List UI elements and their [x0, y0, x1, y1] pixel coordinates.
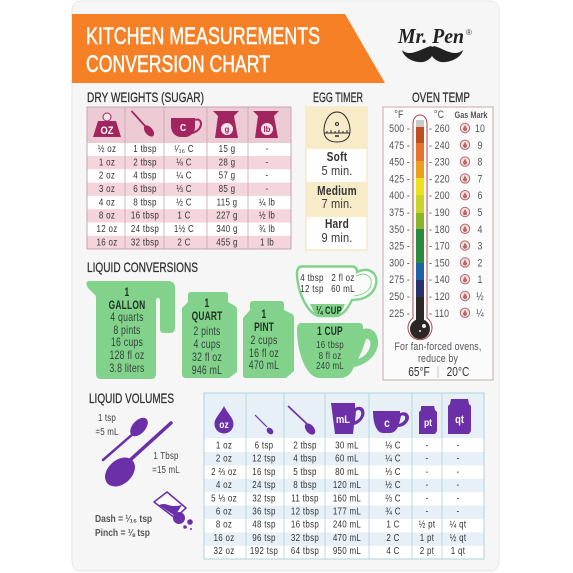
- gas mark numbers: 8: [478, 157, 483, 169]
- dry weights values: 2 C: [177, 237, 191, 248]
- liquid volumes values: 4 oz: [216, 479, 232, 490]
- dry weights values: ¼ C: [176, 170, 192, 181]
- fan-forced note: For fan-forced ovens,: [395, 341, 481, 353]
- heading: liquid conversions: LIQUID CONVERSIONS: [87, 259, 198, 275]
- title banner: CONVERSION CHART: [86, 51, 270, 78]
- dry weights values: [97, 143, 275, 248]
- icon: scale pounds: lb: [263, 125, 271, 134]
- liquid volumes values: 96 tsp: [252, 532, 276, 543]
- panel: egg timer: Medium: [317, 184, 357, 198]
- liquid volumes values: ⅛ C: [385, 440, 401, 451]
- liquid volumes values: -: [426, 479, 428, 490]
- liquid volumes values: 950 mL: [333, 545, 361, 556]
- celsius scale: - 240: [429, 140, 450, 152]
- liquid volumes values: [211, 440, 467, 556]
- fahrenheit scale: 450 -: [389, 157, 410, 169]
- heading: liquid volumes: LIQUID VOLUMES: [89, 390, 174, 406]
- dry weights values: ½ oz: [98, 143, 116, 154]
- icon: quart jar: qt: [455, 414, 465, 426]
- teaspoon label: [95, 412, 119, 437]
- title banner: [72, 14, 385, 83]
- icon: oz drop: oz: [219, 419, 229, 430]
- panel: pint jar: 16 fl oz: [249, 348, 279, 360]
- dry weights values: 227 g: [216, 210, 238, 221]
- liquid volumes values: 32 oz: [214, 545, 235, 556]
- oven column headings: [394, 109, 488, 121]
- panel: gallon jug: GALLON: [109, 300, 145, 312]
- panel: quart jar: 946 mL: [192, 365, 222, 377]
- dry weights values: 57 g: [219, 170, 235, 181]
- icon: mL mug: [331, 403, 365, 434]
- celsius scale: - 150: [429, 258, 450, 270]
- gas mark numbers: 5: [478, 207, 483, 219]
- panel: quarter cup: 60 mL: [331, 283, 355, 294]
- liquid volumes values: 8 oz: [216, 519, 232, 530]
- tablespoon label: 1 Tbsp: [153, 450, 179, 461]
- dry weights values: 28 g: [219, 156, 235, 168]
- liquid volumes values: 2 ⅔ oz: [211, 466, 237, 477]
- gas mark numbers: [475, 123, 485, 320]
- panel: quart jar: 4 cups: [193, 339, 221, 351]
- panel: quarter cup: 4 tbsp: [300, 272, 324, 283]
- gas mark numbers: 4: [478, 224, 483, 236]
- liquid volumes values: 2 tbsp: [293, 440, 317, 451]
- liquid volumes values: -: [457, 466, 459, 477]
- logo: Mr. Pen: [397, 24, 472, 62]
- panel: quart jar: 1: [205, 298, 209, 310]
- gas mark numbers: 1: [478, 274, 483, 287]
- liquid volumes values: 16 oz: [214, 532, 235, 543]
- gas mark numbers: 10: [475, 123, 485, 135]
- liquid volumes values: 2 pt: [420, 545, 434, 556]
- fahrenheit scale: 500 -: [389, 123, 410, 135]
- gas mark icons: [460, 123, 470, 317]
- dry weights values: 32 tbsp: [131, 237, 159, 248]
- panel: one cup: 16 tbsp: [316, 339, 344, 350]
- liquid volumes values: 2 C: [386, 532, 400, 543]
- panel: one cup: 1 CUP: [317, 326, 343, 338]
- panel: gallon jug: 3.8 liters: [109, 363, 145, 375]
- panel: egg timer: Hard: [325, 217, 349, 231]
- panel: egg timer: 5 min.: [321, 163, 353, 178]
- liquid volumes values: 32 tsp: [252, 492, 276, 504]
- liquid volumes values: 470 mL: [333, 532, 361, 543]
- icon: egg timer: [324, 112, 350, 142]
- dry weights values: 4 oz: [99, 196, 115, 208]
- panel: gallon jug: 16 cups: [111, 337, 143, 349]
- liquid volumes values: -: [457, 479, 459, 490]
- liquid volumes values: -: [457, 453, 459, 464]
- icon: salt shaker: [154, 492, 193, 530]
- liquid volumes values: -: [457, 492, 459, 504]
- liquid volumes values: ½ pt: [419, 519, 436, 530]
- panel: quarter cup: 12 tsp: [300, 283, 324, 294]
- fahrenheit scale: 350 -: [389, 224, 410, 236]
- panel: gallon jug: 128 fl oz: [109, 350, 145, 362]
- liquid volumes values: 5 ⅓ oz: [211, 492, 237, 504]
- liquid volumes values: 32 tbsp: [291, 532, 319, 543]
- liquid volumes values: -: [426, 492, 428, 504]
- liquid volumes values: 1 oz: [216, 440, 232, 451]
- dry weights values: -: [266, 143, 268, 154]
- dry weights values: 1 C: [177, 210, 191, 221]
- dry weights values: 455 g: [216, 237, 238, 248]
- liquid volumes values: -: [426, 453, 428, 464]
- dash and pinch note: Dash = ¹⁄₁₆ tsp: [95, 513, 152, 524]
- dry weights values: 3 oz: [99, 183, 115, 194]
- dry weights values: 1 oz: [99, 156, 115, 168]
- oven column headings: °C: [434, 109, 444, 121]
- fan-forced note: [395, 341, 481, 379]
- liquid volumes values: 240 mL: [333, 519, 361, 530]
- dry weights values: 2 oz: [99, 170, 115, 181]
- liquid volumes values: 12 tsp: [252, 453, 276, 464]
- dry weights values: -: [266, 170, 268, 181]
- fan-forced note: 65°F: [408, 365, 430, 379]
- panel: pint jar: 2 cups: [250, 335, 278, 347]
- liquid volumes values: 1 pt: [420, 532, 434, 543]
- fahrenheit scale: 225 -: [389, 308, 410, 320]
- dry weights values: 85 g: [219, 183, 235, 194]
- liquid volumes values: 16 tsp: [252, 466, 276, 477]
- icon: pint jar: [419, 406, 437, 434]
- heading: egg timer: EGG TIMER: [313, 89, 363, 105]
- celsius scale: - 190: [429, 207, 450, 219]
- liquid volumes values: 11 tbsp: [291, 492, 319, 504]
- fahrenheit scale: 250 -: [389, 291, 410, 303]
- liquid volumes values: 1 C: [386, 519, 400, 530]
- icon: teaspoon small: [255, 415, 275, 436]
- liquid volumes values: ½ C: [385, 479, 401, 490]
- dry weights values: 16 tbsp: [131, 210, 159, 221]
- fahrenheit scale: 300 -: [389, 258, 410, 270]
- icon: cup: [171, 118, 201, 137]
- liquid volumes values: 5 tbsp: [293, 466, 317, 477]
- liquid volumes values: 120 mL: [333, 479, 361, 490]
- panel: one cup: [297, 323, 378, 378]
- liquid volumes values: ¼ C: [385, 453, 401, 464]
- dry weights values: ¼ lb: [259, 196, 275, 208]
- gas mark numbers: 7: [478, 174, 483, 186]
- dry weights values: 4 tbsp: [133, 170, 157, 181]
- dry weights values: 1 lb: [260, 237, 274, 248]
- logo: Mr. Pen: ®: [466, 28, 472, 37]
- fahrenheit scale: 400 -: [389, 190, 410, 203]
- liquid volumes values: 12 tbsp: [291, 506, 319, 517]
- liquid volumes values: 160 mL: [333, 492, 361, 504]
- panel: quart jar: 2 pints: [193, 326, 221, 338]
- celsius scale: - 110: [429, 308, 449, 320]
- liquid volumes values: 192 tsp: [250, 545, 278, 556]
- panel: oven temperature: [383, 107, 493, 380]
- oven column headings: Gas Mark: [454, 110, 488, 120]
- dry weights values: ½ C: [176, 196, 192, 208]
- dry weights values: ⅓ C: [176, 183, 192, 194]
- icon: tablespoon large: [288, 406, 317, 437]
- title banner: KITCHEN MEASUREMENTS: [86, 23, 320, 50]
- fahrenheit scale: 425 -: [389, 174, 410, 186]
- liquid volumes values: ½ qt: [450, 532, 467, 543]
- panel: pint jar: PINT: [254, 322, 274, 334]
- panel: quarter cup: [297, 266, 376, 317]
- dry weights values: 1 tbsp: [133, 143, 157, 154]
- dry weights values: 8 oz: [99, 210, 115, 221]
- dash and pinch note: Pinch = ⅛ tsp: [95, 527, 150, 538]
- icon: quart jar: [448, 399, 471, 434]
- celsius scale: - 170: [429, 241, 450, 253]
- liquid volumes values: 177 mL: [333, 506, 361, 517]
- celsius scale: - 220: [429, 174, 450, 186]
- dry weights values: 2 tbsp: [133, 156, 157, 168]
- panel: egg timer: 9 min.: [321, 230, 353, 245]
- liquid volumes values: ¼ qt: [450, 519, 467, 530]
- liquid volumes values: 16 tbsp: [291, 519, 319, 530]
- icon: scale grams: g: [225, 125, 230, 134]
- oven column headings: °F: [394, 109, 404, 121]
- icon: teaspoon: [103, 414, 151, 460]
- panel: pint jar: [243, 301, 294, 378]
- liquid volumes values: 64 tbsp: [291, 545, 319, 556]
- liquid volumes values: -: [457, 440, 459, 451]
- liquid volumes values: 1 qt: [451, 545, 465, 556]
- liquid volumes values: ¾ C: [385, 506, 401, 517]
- celsius scale: [429, 123, 450, 320]
- dry weights values: 340 g: [216, 223, 238, 234]
- panel: egg timer: [306, 107, 367, 250]
- dry weights values: 6 tbsp: [133, 183, 157, 194]
- panel: gallon jug: [86, 281, 175, 379]
- panel: quart jar: [182, 292, 237, 378]
- fan-forced note: 20°C: [447, 365, 469, 379]
- panel: one cup: 240 mL: [316, 360, 344, 371]
- panel: quarter cup: ¼ CUP: [316, 305, 342, 317]
- fahrenheit scale: 275 -: [389, 274, 410, 287]
- panel: liquid volumes table: [204, 393, 484, 559]
- panel: dry weights table: [87, 107, 291, 249]
- icon: cup: [373, 411, 409, 433]
- tablespoon label: =15 mL: [152, 464, 180, 475]
- liquid volumes values: -: [426, 506, 428, 517]
- gas mark numbers: 3: [478, 241, 483, 253]
- dry weights values: 15 g: [219, 143, 235, 154]
- dry weights values: 12 oz: [97, 223, 118, 234]
- gas mark numbers: ¼: [476, 308, 484, 320]
- icon: tablespoon: [132, 111, 156, 138]
- icon: tablespoon: [99, 423, 171, 492]
- liquid volumes values: 24 tsp: [252, 479, 276, 490]
- celsius scale: - 180: [429, 224, 450, 236]
- panel: quarter cup: 2 fl oz: [331, 272, 355, 283]
- teaspoon label: 1 tsp: [98, 412, 116, 423]
- gas mark numbers: ½: [476, 291, 484, 303]
- panel: one cup: 8 fl oz: [319, 350, 342, 361]
- icon: mL mug: mL: [336, 414, 350, 426]
- dry weights values: ¹⁄₁₆ C: [174, 143, 194, 154]
- teaspoon label: =5 mL: [95, 426, 119, 437]
- panel: gallon jug: 4 quarts: [110, 312, 144, 324]
- liquid volumes values: 60 mL: [335, 453, 359, 464]
- liquid volumes values: 30 mL: [335, 440, 359, 451]
- dry weights values: -: [266, 156, 268, 168]
- liquid volumes values: 48 tsp: [252, 519, 276, 530]
- card background: [72, 1, 499, 571]
- panel: pint jar: 470 mL: [249, 360, 279, 372]
- dry weights values: 1½ C: [174, 223, 194, 234]
- liquid volumes values: -: [457, 506, 459, 517]
- icon: scale grams: [213, 111, 239, 138]
- gas mark numbers: 9: [478, 140, 483, 152]
- thermometer: [408, 115, 432, 340]
- liquid volumes values: 6 tsp: [255, 440, 273, 451]
- heading: oven temp: OVEN TEMP: [412, 89, 470, 105]
- heading: dry weights: DRY WEIGHTS (SUGAR): [87, 89, 204, 105]
- dry weights values: ⅛ C: [176, 156, 192, 168]
- dry weights values: -: [266, 183, 268, 194]
- panel: gallon jug: 8 pints: [113, 325, 141, 337]
- gas mark numbers: 2: [478, 258, 483, 270]
- liquid volumes values: ⅓ C: [385, 466, 401, 477]
- celsius scale: - 140: [429, 274, 450, 287]
- icon: oz weight: OZ: [101, 125, 113, 137]
- panel: pint jar: 1: [262, 309, 266, 321]
- icon: oz weight: [93, 113, 121, 137]
- panel: quart jar: QUART: [192, 311, 223, 323]
- dry weights values: 8 tbsp: [133, 196, 157, 208]
- dry weights values: ½ lb: [259, 210, 275, 221]
- panel: egg timer: Soft: [327, 150, 347, 164]
- icon: cup: c: [384, 417, 390, 430]
- logo: Mr. Pen: Mr. Pen: [397, 24, 464, 48]
- celsius scale: - 200: [429, 190, 450, 203]
- celsius scale: - 120: [429, 291, 450, 303]
- liquid volumes values: 8 tbsp: [293, 479, 317, 490]
- liquid volumes values: 80 mL: [335, 466, 359, 477]
- panel: quart jar: 32 fl oz: [192, 352, 222, 364]
- dry weights values: 24 tbsp: [131, 223, 159, 234]
- dry weights values: 115 g: [217, 196, 237, 208]
- liquid volumes values: 6 oz: [216, 506, 232, 517]
- fahrenheit scale: 475 -: [389, 140, 410, 152]
- icon: cup: C: [180, 122, 186, 133]
- fan-forced note: reduce by: [418, 353, 458, 365]
- tablespoon label: [152, 450, 180, 475]
- celsius scale: - 260: [429, 123, 450, 135]
- liquid volumes values: 4 tbsp: [293, 453, 317, 464]
- fahrenheit scale: 325 -: [389, 241, 410, 253]
- dash and pinch note: [95, 513, 152, 538]
- fahrenheit scale: 375 -: [389, 207, 410, 219]
- liquid volumes values: 2 oz: [216, 453, 232, 464]
- dry weights values: 16 oz: [97, 237, 118, 248]
- dry weights values: ¾ lb: [259, 223, 275, 234]
- panel: gallon jug: 1: [125, 287, 129, 299]
- fahrenheit scale: [389, 123, 410, 320]
- icon: pint jar: pt: [424, 417, 432, 428]
- liquid volumes values: -: [426, 440, 428, 451]
- gas mark numbers: 6: [478, 190, 483, 203]
- icon: scale pounds: [253, 111, 279, 138]
- liquid volumes values: 36 tsp: [252, 506, 276, 517]
- liquid volumes values: 4 C: [386, 545, 400, 556]
- liquid volumes values: -: [426, 466, 428, 477]
- panel: egg timer: 7 min.: [321, 196, 353, 211]
- liquid volumes values: ⅔ C: [385, 492, 401, 504]
- celsius scale: - 230: [429, 157, 450, 169]
- icon: oz drop: [214, 406, 234, 434]
